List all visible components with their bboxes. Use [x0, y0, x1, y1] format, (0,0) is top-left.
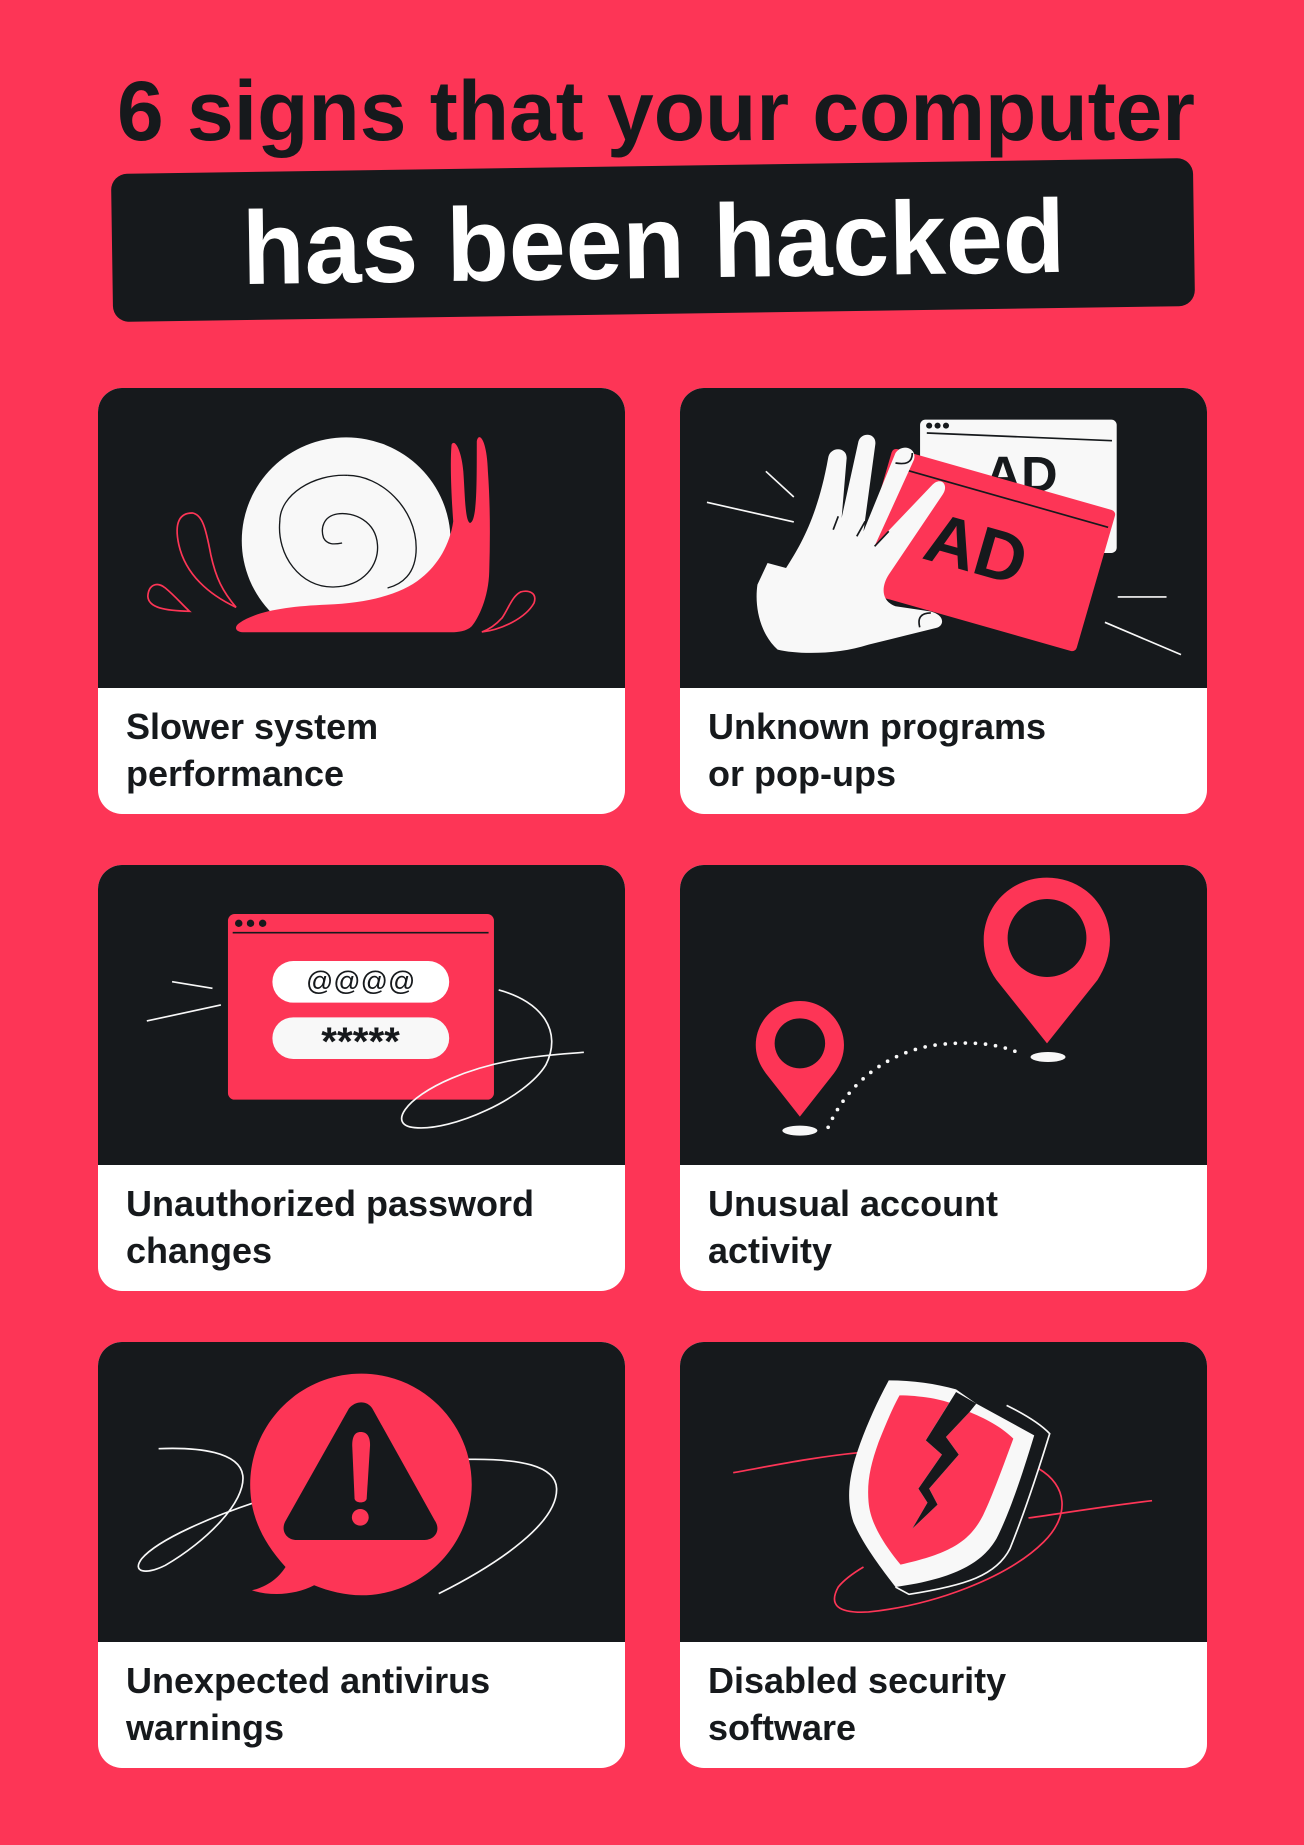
label: activity — [708, 1230, 832, 1271]
icon: warning bubble — [138, 1374, 557, 1595]
panel: slower system performance — [98, 388, 625, 814]
label: Unauthorized password — [126, 1183, 534, 1224]
icon: login window: @@@@ — [306, 966, 415, 996]
panel: unexpected antivirus warnings — [98, 1342, 625, 1768]
icon: broken shield — [733, 1380, 1152, 1612]
icon: location pins — [756, 878, 1110, 1136]
panel: unusual account activity — [680, 865, 1207, 1291]
label: software — [708, 1707, 856, 1748]
panel: unknown programs — [680, 388, 1207, 814]
icon: snail — [148, 437, 535, 644]
label: changes — [126, 1230, 272, 1271]
label: performance — [126, 753, 344, 794]
label: Unusual account — [708, 1183, 998, 1224]
label: warnings — [125, 1707, 284, 1748]
icon: hand blocking ads: AD — [916, 497, 1036, 600]
label: Unknown programs — [708, 706, 1046, 747]
icon: login window — [147, 914, 584, 1128]
label: Unexpected antivirus — [126, 1660, 490, 1701]
label: or pop-ups — [708, 753, 896, 794]
title: 6 signs that your computer — [117, 64, 1195, 158]
icon: login window: ***** — [321, 1019, 400, 1064]
banner — [111, 158, 1195, 322]
panel: unauthorized password changes — [98, 865, 625, 1291]
label: Disabled security — [708, 1660, 1006, 1701]
banner: has been hacked — [241, 179, 1066, 307]
icon: hand blocking ads — [707, 420, 1181, 655]
icon: hand blocking ads: AD — [985, 447, 1058, 502]
label: Slower system — [126, 706, 378, 747]
panel: disabled security software — [680, 1342, 1207, 1768]
